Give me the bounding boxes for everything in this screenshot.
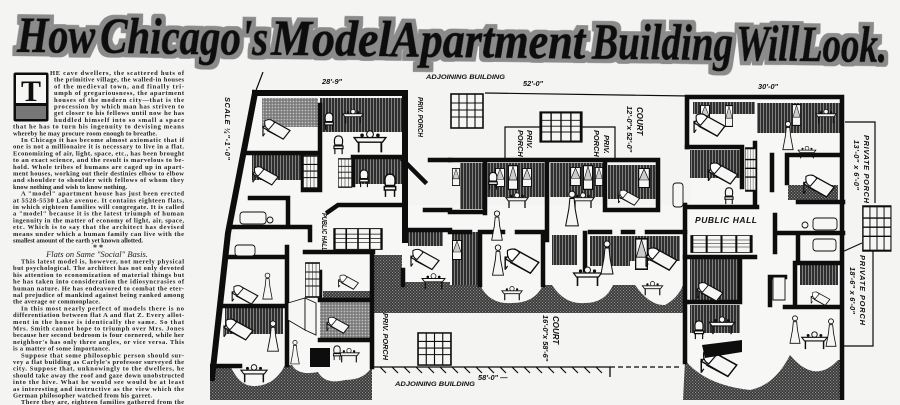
private porch label, lower right	[848, 255, 867, 326]
article opening paragraph: to an exact science, and the result is marvelous to be-	[13, 157, 184, 164]
article opening paragraph: huddled himself into so small a space	[54, 117, 184, 124]
article opening paragraph: in which eighteen families will congregate. It is called	[13, 204, 184, 211]
article second section: city. Suppose that, unknowingly to the dwellers, he	[13, 366, 184, 373]
article opening paragraph: the primitive village, the walled-in houses	[54, 77, 184, 84]
article opening paragraph: procession by which man has striven to	[54, 104, 184, 110]
dimension 28 ft 9 in: 28'-9"	[321, 77, 343, 86]
figures	[263, 121, 836, 364]
white interior of the plan	[210, 93, 842, 400]
furniture: chairs	[325, 113, 733, 360]
private porch label, upper right: PRIVATE PORCH	[862, 135, 871, 204]
dark stippled floor bands	[210, 255, 842, 400]
private porch label, centre right: PORCH	[592, 130, 601, 157]
floor plan	[210, 72, 891, 400]
bathroom fixtures	[235, 183, 837, 367]
private porch label, centre left: PORCH	[516, 130, 525, 157]
private porch label, centre left	[516, 130, 534, 157]
court label, top	[625, 106, 644, 153]
article second section: he has taken into consideration the idiosyncrasies of	[13, 279, 185, 286]
court label, top: COURT	[635, 107, 644, 136]
title: How	[16, 8, 96, 65]
title	[16, 8, 887, 74]
article opening paragraph: umph of gregariousness, the apartment	[54, 90, 185, 97]
furniture: beds	[224, 114, 834, 376]
article second section: as interesting and instructive as the view which the	[13, 386, 184, 393]
article opening paragraph: ment houses, working out their destinies elbow to elbow	[13, 170, 184, 178]
public hall label, left wing: PUBLIC HALL	[320, 213, 329, 251]
dimension 52 ft: 52'-0"	[523, 79, 544, 88]
dimension 30 ft: 30'-0"	[758, 82, 779, 91]
article opening paragraph: a "model" because it is the latest triumph of human	[13, 211, 184, 218]
article opening paragraph: of the medieval town, and finally tri-	[54, 83, 184, 90]
private porch label, top left: PRIV. PORCH	[416, 97, 425, 138]
article second section: nal prejudice of mankind against being ranked among	[13, 292, 185, 299]
private porch label, upper right	[852, 135, 871, 204]
outer lines and adjoining lot edges	[255, 72, 875, 377]
article opening paragraph	[13, 70, 185, 244]
bottom adjoining building label: ADJOINING BUILDING	[394, 381, 475, 388]
top adjoining building label: ADJOINING BUILDING	[425, 74, 505, 81]
article second section: the average or commonplace.	[13, 299, 100, 306]
article second section: In this most nearly perfect of models there is no	[21, 305, 184, 312]
plan labels	[223, 74, 871, 388]
article opening paragraph: HE cave dwellers, the scattered huts of	[50, 70, 185, 77]
article second section: because her second bedroom is four cornered, while her	[13, 332, 184, 339]
article opening paragraph: whereby he may procure room enough to breathe.	[13, 130, 157, 137]
article text column	[13, 70, 185, 405]
title: Will	[736, 16, 800, 73]
court label, top: 12'-0"x 52'-0"	[625, 106, 634, 153]
article second section: his attention to economization of material things but	[13, 272, 185, 279]
article opening paragraph: hold. Whole tribes of humans are caged up in apart-	[13, 164, 184, 171]
private porch label, centre right	[592, 130, 611, 157]
article second section: into the hive. What he would see would be at least	[13, 379, 185, 386]
article second section: neighbor's has only three angles, or vice versa. This	[13, 339, 184, 346]
title: Apartment	[388, 12, 587, 71]
private porch label, lower right: PRIVATE PORCH	[858, 255, 867, 326]
drop cap T: T	[21, 75, 41, 108]
article second section: should take away the roof and gaze down unobstructed	[13, 372, 184, 379]
private porch label, centre right: PRIV.	[602, 135, 611, 154]
title: Building	[591, 15, 733, 72]
public hall label, right: PUBLIC HALL	[695, 215, 757, 225]
court label, bottom: COURT	[551, 316, 560, 345]
court label, bottom	[541, 315, 560, 362]
article opening paragraph: that he has to turn his ingenuity to devising means	[13, 124, 184, 131]
private porch label, centre left: PRIV.	[525, 130, 534, 149]
article opening paragraph: Economizing of air, light, space, etc., has been brought	[13, 150, 185, 157]
article second section: This latest model is, however, not merely physical	[21, 258, 184, 266]
article second section: vey a flat building as Carlyle's professor surveyed the	[13, 359, 184, 366]
subheading: Flats on Same "Social" Basis.	[45, 249, 148, 259]
private porch label, lower right: 18'-6" x 6'-0"	[848, 267, 857, 314]
article second section: human nature. He has endeavored to combat the eter-	[13, 285, 184, 292]
article opening paragraph: one is not a millionaire it is necessary to live in a flat.	[13, 144, 184, 151]
article opening paragraph: get closer to his fellows until now he has	[54, 110, 184, 117]
article opening paragraph: houses of the modern city—that is the	[54, 97, 184, 104]
article second section: but psychological. The architect has not only devoted	[13, 265, 184, 272]
article second section	[13, 258, 185, 405]
article second section: Mrs. Smith cannot hope to triumph over Mrs. Jones	[13, 326, 184, 332]
private porch label, upper right: 13'-0" x 6'-0"	[852, 140, 861, 190]
public hall doors	[288, 277, 785, 335]
structural walls	[212, 93, 843, 400]
article opening paragraph: etc. Which is to say that the architect has devised	[13, 224, 184, 231]
dimension 58 ft: 58'-0" —	[478, 373, 508, 382]
article opening paragraph: at 5528-5530 Lake avenue. It contains eighteen flats,	[13, 197, 184, 204]
wall panelling	[225, 98, 840, 338]
article opening paragraph: means under which a human family can live with the	[13, 231, 184, 238]
article opening paragraph: smallest amount of the earth yet known allotted.	[13, 238, 143, 244]
title: Model	[270, 11, 392, 68]
article second section: is a matter of some importance.	[13, 346, 110, 353]
furniture: tables and desks	[241, 109, 836, 382]
title: Chicago's	[100, 9, 268, 67]
article opening paragraph: A "model" apartment house has just been erected	[21, 191, 184, 198]
scale label: SCALE ¼"-1'-0"	[223, 97, 232, 160]
article opening paragraph: In Chicago it has become almost axiomatic that if	[21, 137, 185, 144]
article second section: Suppose that some philosophic person should sur-	[21, 352, 184, 359]
article opening paragraph: and shoulder to shoulder with fellows of whom they	[13, 177, 185, 184]
private porch label, bottom: PRIV. PORCH	[381, 313, 390, 361]
article opening paragraph: ingenuity in the matter of economy of light, air, space,	[13, 217, 184, 224]
windows in the central rooms	[452, 105, 801, 269]
article second section: German philosopher watched from his garret.	[13, 392, 152, 400]
article opening paragraph: know nothing and wish to know nothing.	[13, 184, 127, 191]
court label, bottom: 16'-0"x 58'-6"	[541, 315, 550, 362]
article second section: differentiation between flat A and flat Z. Every allot-	[13, 312, 184, 319]
drop cap T	[14, 72, 48, 122]
article second section: ment in the house is identically the same. So that	[13, 319, 185, 326]
staircases	[303, 94, 891, 365]
section separator asterisks: * *	[93, 243, 103, 252]
